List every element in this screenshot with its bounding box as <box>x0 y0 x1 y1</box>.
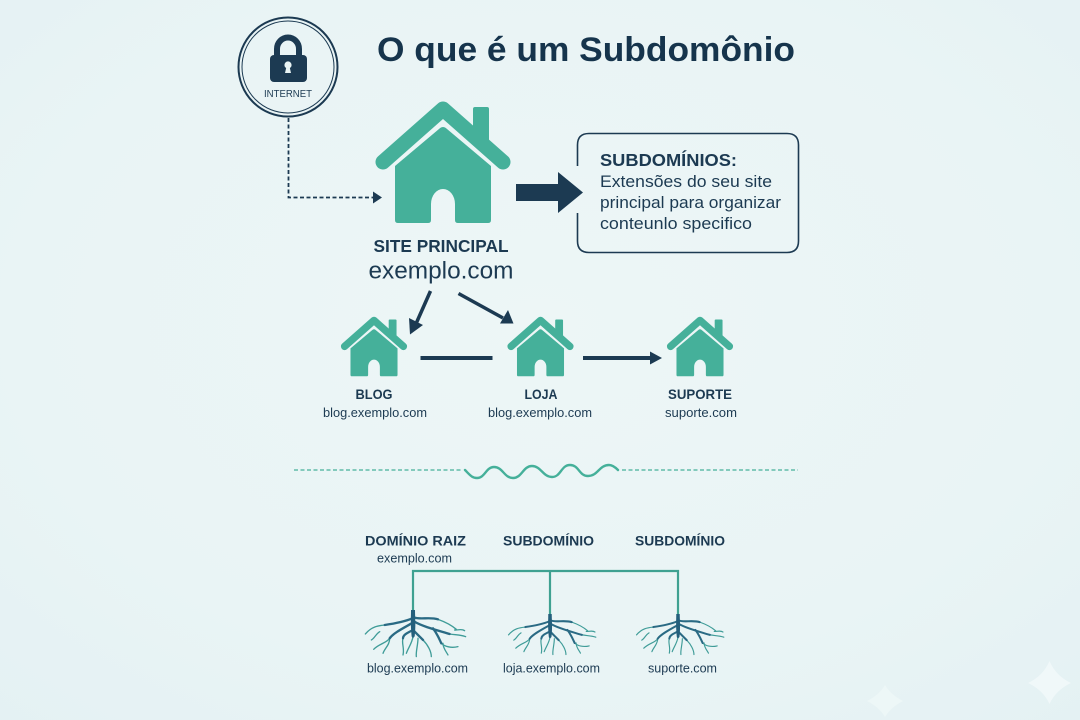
icon: support house <box>671 319 729 376</box>
root label blog: blog.exemplo.com <box>367 660 468 676</box>
arrow: store to support <box>583 352 662 364</box>
main site label <box>368 236 514 284</box>
callout: subdomain definition: Extensões do seu site <box>600 172 772 191</box>
decorative sparkle large <box>1028 661 1071 704</box>
arrow: main site to definition <box>516 172 583 213</box>
support label <box>665 386 737 420</box>
arrow: main site to blog <box>409 291 430 334</box>
root domain label: exemplo.com <box>377 550 452 566</box>
support label: suporte.com <box>665 405 737 420</box>
icon: roots store <box>509 614 596 655</box>
root label support: suporte.com <box>648 660 717 676</box>
blog label <box>323 386 427 420</box>
icon: roots blog <box>365 610 466 657</box>
store label: blog.exemplo.com <box>488 405 592 420</box>
tree connector lines <box>413 571 678 615</box>
icon: blog house <box>345 319 403 376</box>
store label <box>488 386 592 420</box>
callout: subdomain definition: principal para organizar <box>600 193 781 212</box>
title: O que é um Subdomônio <box>377 31 795 69</box>
root domain label: DOMÍNIO RAIZ <box>365 532 466 548</box>
root domain label <box>365 532 466 566</box>
subdomain heading 2: SUBDOMÍNIO <box>635 532 725 548</box>
icon: internet padlock badge: INTERNET <box>264 88 313 100</box>
decorative sparkle small <box>867 685 903 717</box>
icon: store house <box>511 319 570 376</box>
callout: subdomain definition <box>578 134 798 252</box>
arrow: dashed internet to main site <box>288 118 382 204</box>
blog label: blog.exemplo.com <box>323 405 427 420</box>
connector: blog to store <box>420 356 492 360</box>
subdomain heading 1: SUBDOMÍNIO <box>503 532 594 548</box>
icon: roots support <box>637 614 724 655</box>
root label store: loja.exemplo.com <box>503 660 600 676</box>
support label: SUPORTE <box>668 386 732 402</box>
main site label: exemplo.com <box>368 258 514 284</box>
icon: main site house <box>383 107 503 223</box>
main site label: SITE PRINCIPAL <box>374 236 509 256</box>
arrow: main site to store <box>458 294 514 324</box>
callout: subdomain definition: conteunlo specifico <box>600 214 752 233</box>
store label: LOJA <box>524 386 558 402</box>
callout: subdomain definition: SUBDOMÍNIOS: <box>600 149 737 170</box>
section divider with wave <box>294 465 798 478</box>
blog label: BLOG <box>356 386 393 402</box>
icon: internet padlock badge <box>238 18 338 116</box>
